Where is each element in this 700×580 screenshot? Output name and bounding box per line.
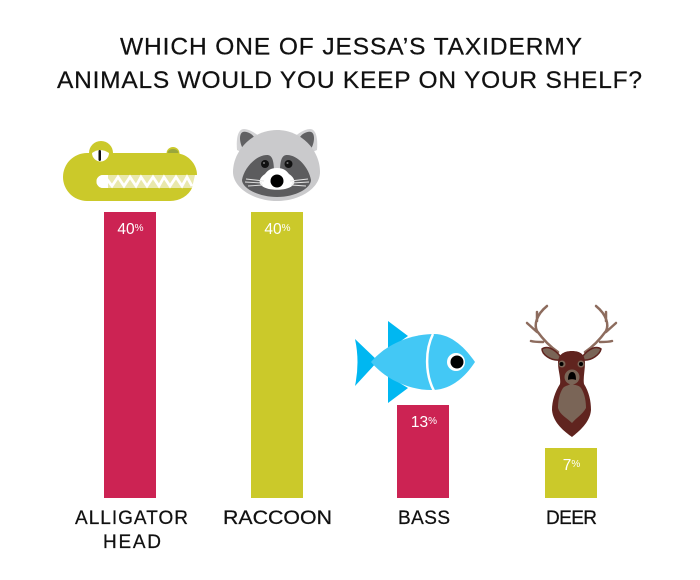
label: bass: BASS (398, 508, 450, 529)
bar: deer 7%: 7 (563, 457, 571, 474)
label: deer: DEER (546, 508, 597, 529)
bar: alligator head 40%: 40 (117, 221, 135, 238)
bar: deer 7% (545, 448, 597, 498)
label: alligator head: ALLIGATOR (75, 508, 188, 529)
icon: deer head (527, 306, 616, 437)
bar: alligator head 40% (104, 212, 156, 498)
icon: bass fish (355, 321, 475, 403)
title (57, 34, 642, 94)
label: raccoon: RACCOON (223, 508, 332, 529)
bar: raccoon 40%: 40 (264, 221, 282, 238)
bar: bass 13%: 13 (411, 414, 428, 431)
bar: bass 13% (397, 405, 449, 498)
bar: raccoon 40%: % (282, 223, 291, 234)
bar: raccoon 40% (251, 212, 303, 498)
label: alligator head (75, 508, 188, 553)
title: WHICH ONE OF JESSA’S TAXIDERMY (120, 34, 582, 60)
bar: bass 13%: % (428, 416, 437, 427)
bar: deer 7%: % (571, 459, 580, 470)
title: ANIMALS WOULD YOU KEEP ON YOUR SHELF? (57, 67, 642, 94)
icon: raccoon head (233, 129, 320, 201)
bar: alligator head 40%: % (135, 223, 144, 234)
icon: alligator head (63, 141, 197, 201)
label: alligator head: HEAD (103, 532, 161, 553)
